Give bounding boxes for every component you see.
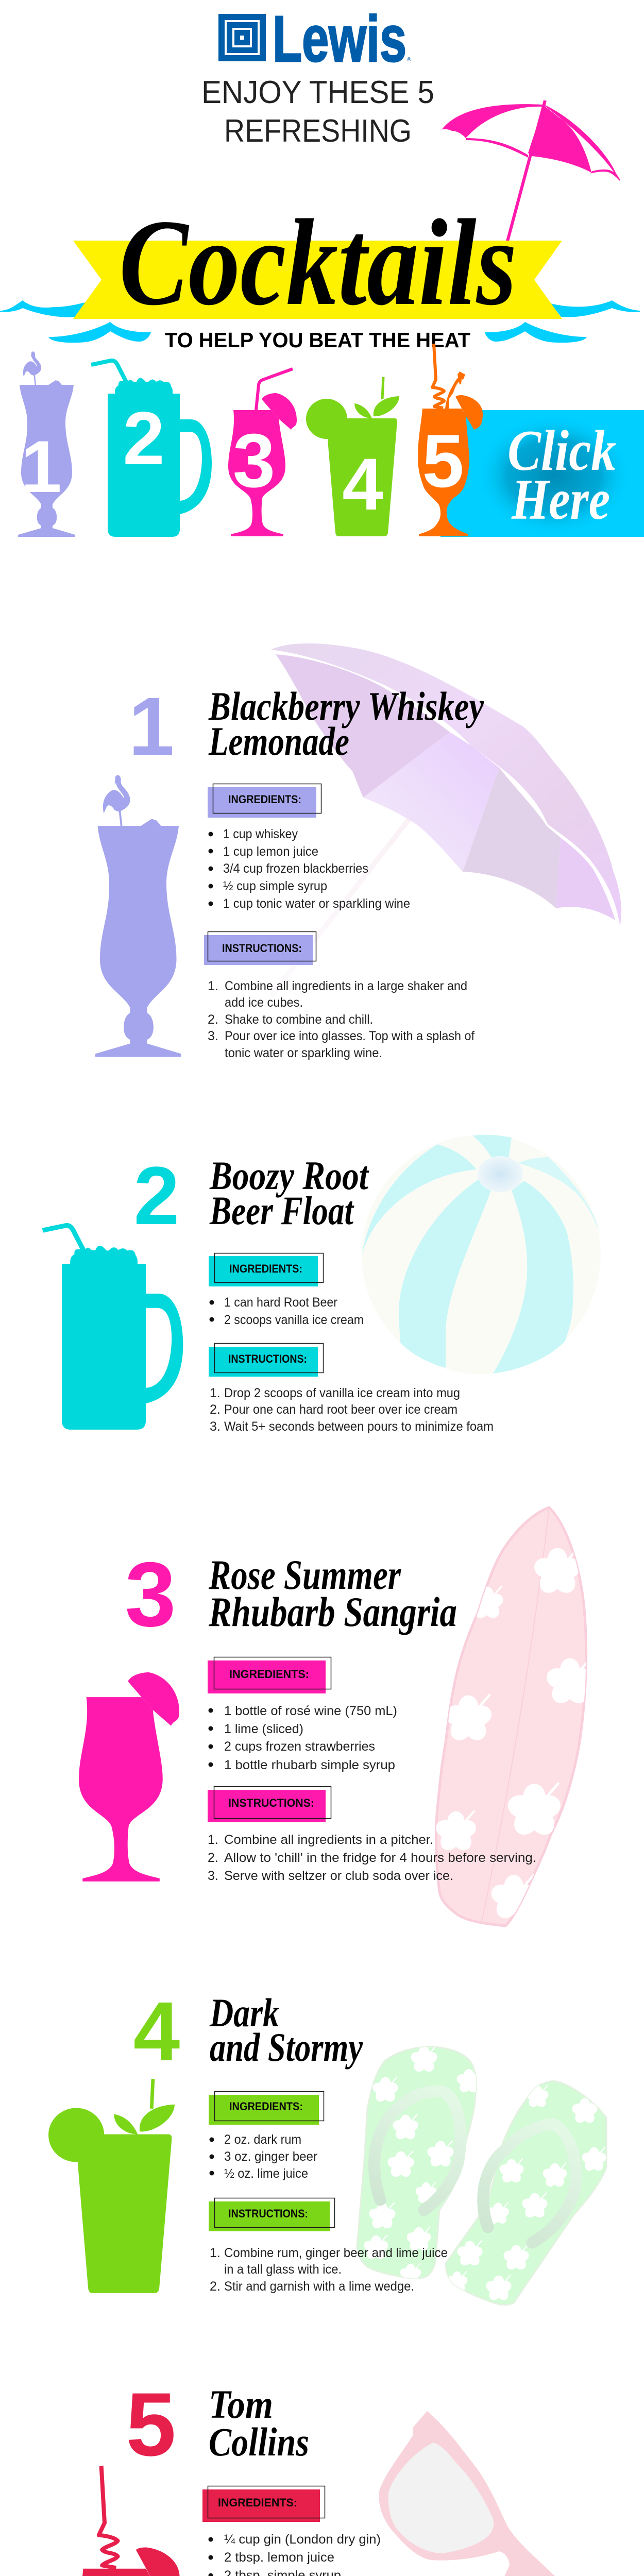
drink title: Boozy Root [209,1153,369,1198]
illustration: surfboard [433,1507,596,1926]
drink title [208,1551,457,1635]
instruction list: Combine all ingredients in a pitcher. [224,1833,433,1847]
instruction list: Shake to combine and chill. [225,1012,373,1027]
label: instructions: INSTRUCTIONS: [228,2207,308,2220]
instruction list [208,979,474,1060]
icon: pink glass 3: 3 [233,418,275,503]
drink title [209,1990,363,2070]
instruction list: 2. [210,1402,221,1417]
icon: pink beach umbrella [442,100,620,241]
ingredient list: 2 cups frozen strawberries [224,1739,375,1754]
icon: root beer mug [43,1226,183,1430]
drink title: Tom [209,2382,273,2427]
instruction list: add ice cubes. [225,995,303,1010]
icon: orange glass 5 [418,344,483,536]
label: instructions [208,1787,331,1822]
panel: recipe 3 rose summer rhubarb sangria [79,1507,596,1926]
drink title: Collins [209,2419,309,2464]
instruction list: tonic water or sparkling wine. [225,1046,382,1060]
ingredient list: ½ oz. lime juice [224,2166,308,2181]
waves behind banner [0,300,640,343]
ingredient list: 1 cup whiskey [223,827,298,841]
drink title [208,684,484,764]
number 4: 4 [133,1984,180,2078]
subtitle: to help you beat the heat: TO HELP YOU BEAT THE HEAT [165,328,470,352]
ingredient list [208,2532,388,2576]
label: ingredients: INGREDIENTS: [218,2496,297,2509]
label: ingredients [208,784,321,818]
illustration: beach ball [362,1135,601,1374]
ingredient list [208,1704,397,1772]
instruction list: 2. [210,2279,221,2294]
number 5: 5 [126,2375,176,2475]
ingredient list: 1 can hard Root Beer [224,1295,337,1310]
icon: lavender glass 1 [18,351,75,537]
ingredient list [208,827,410,911]
panel: recipe 2 boozy root beer float [43,1135,601,1434]
label: instructions [209,2198,335,2231]
icon: orange glass 5: 5 [422,419,464,503]
panel: recipe 4 dark and stormy [48,1984,607,2305]
banner: yellow ribbon [73,241,562,319]
ingredient list: 1 bottle rhubarb simple syrup [224,1758,395,1772]
drink title: Rhubarb Sangria [208,1588,457,1635]
ingredient list: 1 cup tonic water or sparkling wine [223,896,410,911]
illustration: lavender beach umbrella [271,643,621,996]
drink title: Beer Float [209,1188,354,1233]
label: ingredients: INGREDIENTS: [229,1262,302,1275]
instruction list: Wait 5+ seconds between pours to minimize foam [224,1419,494,1434]
instruction list: in a tall glass with ice. [224,2262,342,2277]
instruction list: Pour one can hard root beer over ice cream [224,1402,457,1417]
number 3: 3 [125,1543,176,1646]
label: ingredients [209,1253,324,1286]
label: instructions [204,931,316,965]
drink title: Rose Summer [208,1551,401,1598]
label: instructions [209,1344,324,1377]
illustration: pink sunglasses [379,2411,634,2576]
instruction list: Combine all ingredients in a large shaker and [225,979,467,993]
title line: enjoy these 5 refreshing: REFRESHING [224,113,412,149]
label: ingredients [209,2092,324,2125]
icon: crimson glass with curly straw [76,2466,180,2576]
label: ingredients: INGREDIENTS: [228,793,301,806]
label: instructions: INSTRUCTIONS: [222,942,302,955]
panel: recipe 1 blackberry whiskey lemonade [95,643,621,1060]
button: click here: Click [507,419,616,483]
instruction list: 3. [208,1029,218,1043]
instruction list [210,1386,494,1434]
instruction list [210,2246,448,2294]
drink title: and Stormy [210,2025,363,2070]
icon: hurricane glass with flamingo [95,775,181,1057]
ingredient list: 2 tbsp. lemon juice [224,2550,334,2565]
instruction list: Stir and garnish with a lime wedge. [224,2279,414,2294]
heading: Cocktails: Cocktails [119,194,517,331]
instruction list: 2. [208,1012,218,1027]
instruction list: Combine rum, ginger beer and lime juice [224,2246,448,2260]
label: ingredients [208,1657,331,1693]
ingredient list: 3/4 cup frozen blackberries [223,861,368,876]
ingredient list [209,1295,364,1327]
drink title: Blackberry Whiskey [208,684,484,728]
illustration: flip-flops [357,2046,607,2305]
instruction list: 1. [208,979,218,993]
title line: enjoy these 5 refreshing [201,75,434,149]
ingredient list: 1 bottle of rosé wine (750 mL) [224,1704,397,1718]
icon: green tall glass with lime [48,2079,175,2293]
ingredient list [209,2132,317,2181]
instruction list: 3. [210,1419,221,1434]
instruction list [208,1833,536,1883]
button: click here: Here [511,468,610,532]
drink title [209,1153,369,1233]
title line: enjoy these 5 refreshing: ENJOY THESE 5 [201,75,434,110]
ingredient list: 3 oz. ginger beer [224,2149,317,2164]
icon: green glass 4 [306,377,399,536]
instruction list: 3. [208,1869,218,1883]
panel: recipe 5 tom collins [76,2375,634,2576]
icon: teal mug 2 [91,361,212,537]
ingredient list: 1 lime (sliced) [224,1722,303,1736]
instruction list: 1. [210,2246,221,2260]
icon: lavender glass 1: 1 [21,426,62,508]
label: instructions: INSTRUCTIONS: [228,1352,307,1365]
ingredient list: 1 cup lemon juice [223,844,318,859]
drink title [209,2382,309,2464]
instruction list: 2. [208,1851,218,1865]
number 2: 2 [134,1149,179,1242]
icon: green glass 4: 4 [342,444,383,526]
instruction list: Allow to 'chill' in the fridge for 4 hours before serving. [224,1851,536,1865]
icon: pink glass with citrus [79,1672,179,1882]
label: ingredients [202,2486,325,2522]
ingredient list: 2 scoops vanilla ice cream [224,1313,364,1327]
label: ingredients: INGREDIENTS: [229,1668,309,1681]
instruction list: 1. [210,1386,221,1400]
instruction list: Drop 2 scoops of vanilla ice cream into mug [224,1386,460,1400]
instruction list: Serve with seltzer or club soda over ice. [224,1869,453,1883]
number 1: 1 [129,680,174,772]
logo: Lewis header: ® [407,57,411,63]
instruction list: 1. [208,1833,218,1847]
logo: Lewis header: Lewis [273,3,406,75]
button: click here [440,410,644,537]
drink title: Lemonade [208,719,349,764]
instruction list: Pour over ice into glasses. Top with a splash of [225,1029,474,1043]
ingredient list: ½ cup simple syrup [223,879,327,893]
drink title: Dark [209,1990,279,2035]
label: instructions: INSTRUCTIONS: [228,1797,314,1809]
ingredient list: ¼ cup gin (London dry gin) [224,2532,381,2547]
icon: teal mug 2: 2 [123,396,165,480]
logo: Lewis header [218,3,411,75]
ingredient list: 2 oz. dark rum [224,2132,301,2147]
icon: pink glass 3 [228,369,297,536]
label: ingredients: INGREDIENTS: [229,2100,303,2113]
